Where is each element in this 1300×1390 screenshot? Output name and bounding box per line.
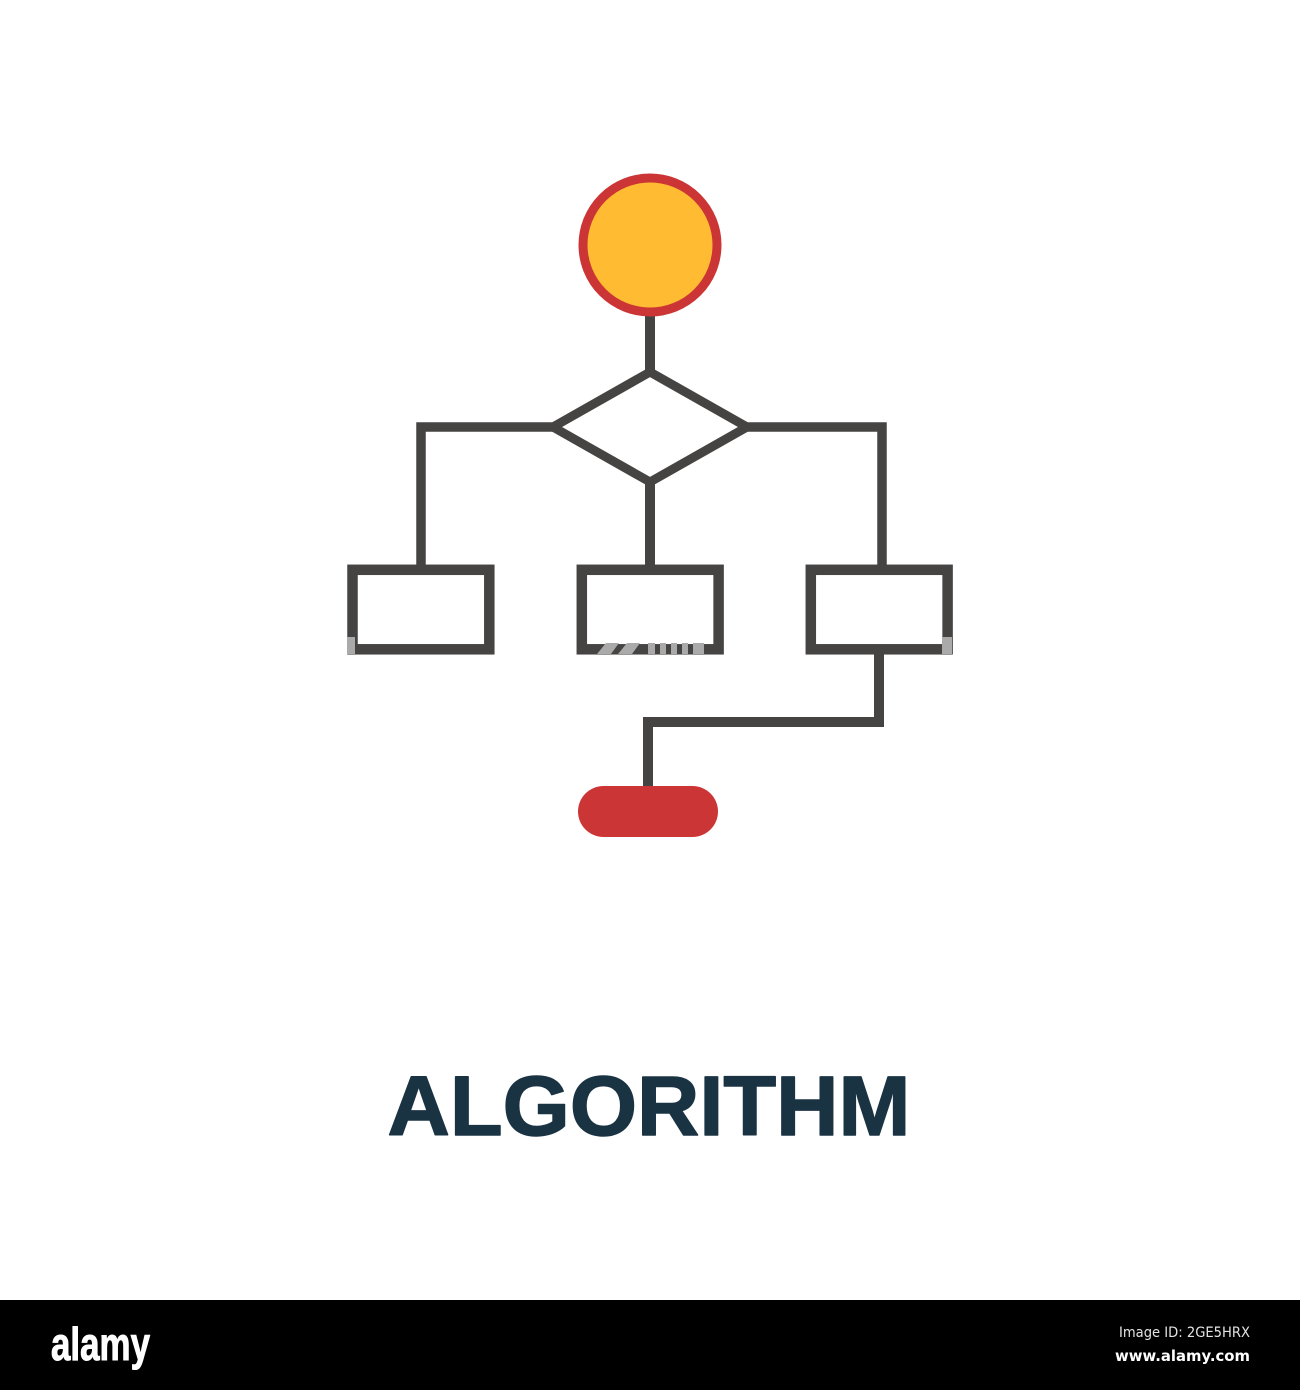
title: ALGORITHM [388, 1059, 910, 1153]
icon: connector lines [421, 312, 882, 788]
icon: middle box [582, 570, 719, 649]
icon: end terminator [578, 786, 718, 837]
website: www.alamy.com [1115, 1347, 1250, 1365]
image id: Image ID: 2GE5HRX [1119, 1325, 1250, 1341]
icon: start circle [583, 178, 717, 312]
footer bar [0, 1300, 1300, 1390]
flowchart icon [352, 178, 948, 837]
icon: left box [352, 570, 489, 649]
icon: decision diamond [553, 372, 747, 482]
footer logo: alamy [51, 1318, 150, 1370]
icon: right box [811, 570, 948, 649]
